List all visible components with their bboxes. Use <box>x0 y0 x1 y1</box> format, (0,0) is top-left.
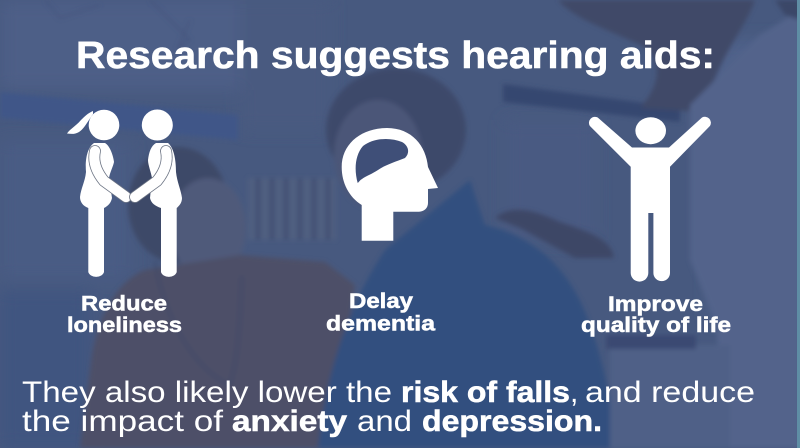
man's shirt <box>318 180 616 448</box>
label: improve quality of life: Improve <box>608 292 703 316</box>
label: reduce loneliness: loneliness <box>67 313 182 337</box>
title: Research suggests hearing aids: <box>76 35 715 77</box>
chair and lower panel <box>610 345 730 448</box>
label: reduce loneliness <box>67 292 182 337</box>
woman figure <box>67 110 126 277</box>
closing text block: , <box>570 376 578 409</box>
carer's hand on shoulder <box>495 210 614 258</box>
brain cutout <box>356 139 408 183</box>
closing text block: and reduce <box>585 376 755 409</box>
label: delay dementia: dementia <box>326 312 436 336</box>
label: delay dementia <box>326 289 436 336</box>
necklace <box>155 262 242 385</box>
man figure <box>135 110 182 277</box>
label: improve quality of life: quality of life <box>581 313 731 337</box>
carer's hair <box>558 0 755 112</box>
wall shelf bands <box>0 92 238 140</box>
icon: head with brain <box>342 128 438 241</box>
closing text block: depression. <box>422 405 602 438</box>
right edge strip <box>797 0 800 448</box>
closing text block: the impact of <box>22 405 224 438</box>
woman's top <box>80 255 355 448</box>
carer's coat <box>690 10 800 448</box>
woman's hair and face <box>128 147 228 263</box>
closing text block: anxiety <box>232 405 347 438</box>
closing text block: and <box>357 405 412 438</box>
closing text block: risk of falls <box>401 376 570 409</box>
icon: two people holding hands <box>67 110 182 277</box>
label: delay dementia: Delay <box>349 289 413 313</box>
label: reduce loneliness: Reduce <box>81 292 167 316</box>
shelf items <box>248 178 336 240</box>
closing text block: They also likely lower the <box>22 376 392 409</box>
icon: person with raised arms <box>589 117 711 282</box>
label: improve quality of life <box>581 292 731 337</box>
map outline on wall <box>45 0 190 48</box>
man's head <box>326 68 466 192</box>
top right corner shadow <box>775 0 800 20</box>
closing text block <box>22 376 755 438</box>
